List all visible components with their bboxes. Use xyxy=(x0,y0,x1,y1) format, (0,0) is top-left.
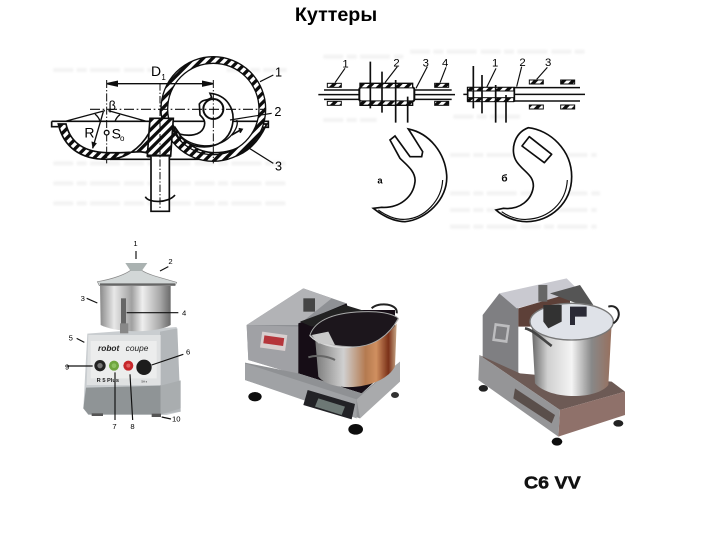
diagram: cutter bowl cross-section xyxy=(52,57,287,211)
callout numbers: 9 xyxy=(65,362,69,371)
callout numbers xyxy=(65,239,190,431)
callout arrows xyxy=(67,251,183,420)
shaft variant b xyxy=(463,66,585,123)
callout numbers: 10 xyxy=(172,415,181,424)
diagram labels: o xyxy=(120,134,125,143)
dimension lines and labels xyxy=(65,75,273,163)
knife b xyxy=(496,128,572,222)
diagram labels: а xyxy=(377,175,383,185)
diagram labels: 4 xyxy=(442,58,448,70)
diagram labels: 2 xyxy=(393,58,400,70)
callout numbers: 3 xyxy=(81,294,85,303)
callout numbers: 8 xyxy=(130,422,135,431)
diagram labels: 2 xyxy=(519,57,526,69)
photo: C6 VV cutter xyxy=(478,278,625,493)
diagram labels: 1 xyxy=(275,66,282,80)
diagram labels: R xyxy=(84,124,94,140)
brand and model text: R 5 Plus xyxy=(97,378,119,384)
diagram labels: б xyxy=(501,172,508,184)
steel bowl xyxy=(525,303,619,396)
diagram labels: D xyxy=(151,63,161,79)
central hub and shaft xyxy=(145,83,175,211)
photo: Robot Coupe R 5 Plus with numbered callouts xyxy=(65,239,190,431)
shaft variant a xyxy=(318,62,455,123)
base xyxy=(245,362,400,435)
brand and model text: coupe xyxy=(126,343,149,353)
callout numbers: 4 xyxy=(182,308,187,317)
callout numbers: 1 xyxy=(133,239,138,248)
brand and model text: 5A s xyxy=(141,379,148,383)
base unit xyxy=(83,327,181,417)
motor housing xyxy=(247,288,395,393)
steel bowl xyxy=(308,304,398,387)
diagram labels: 1 xyxy=(492,58,498,70)
callout numbers: 7 xyxy=(112,422,117,431)
diagram labels: β xyxy=(109,99,116,113)
diagram labels: 1 xyxy=(342,58,349,70)
brand and model text: robot xyxy=(98,343,121,353)
callout numbers: 5 xyxy=(69,333,73,342)
motor housing xyxy=(483,278,593,377)
diagram: knife mounting variants xyxy=(318,52,600,227)
model label: C6 VV xyxy=(524,473,581,493)
diagram labels xyxy=(342,57,551,185)
photo: open bowl cutter xyxy=(245,288,400,435)
diagram labels xyxy=(84,63,282,174)
diagram labels: 2 xyxy=(274,105,281,119)
diagram labels: 3 xyxy=(545,57,551,69)
bowl and lid xyxy=(97,263,177,333)
controls xyxy=(94,360,152,375)
callout numbers: 6 xyxy=(186,347,190,356)
diagram labels: S xyxy=(112,126,121,142)
callout numbers: 2 xyxy=(168,257,173,266)
knife a xyxy=(373,129,447,222)
lid ring xyxy=(161,57,266,161)
brand and model text xyxy=(97,343,149,384)
bowl and rim xyxy=(52,120,268,159)
diagram labels: 3 xyxy=(275,160,282,174)
diagram labels: 3 xyxy=(423,58,429,70)
knife xyxy=(179,93,242,147)
diagram labels: 1 xyxy=(161,73,166,82)
base xyxy=(478,355,625,446)
title: Куттеры xyxy=(295,4,377,26)
